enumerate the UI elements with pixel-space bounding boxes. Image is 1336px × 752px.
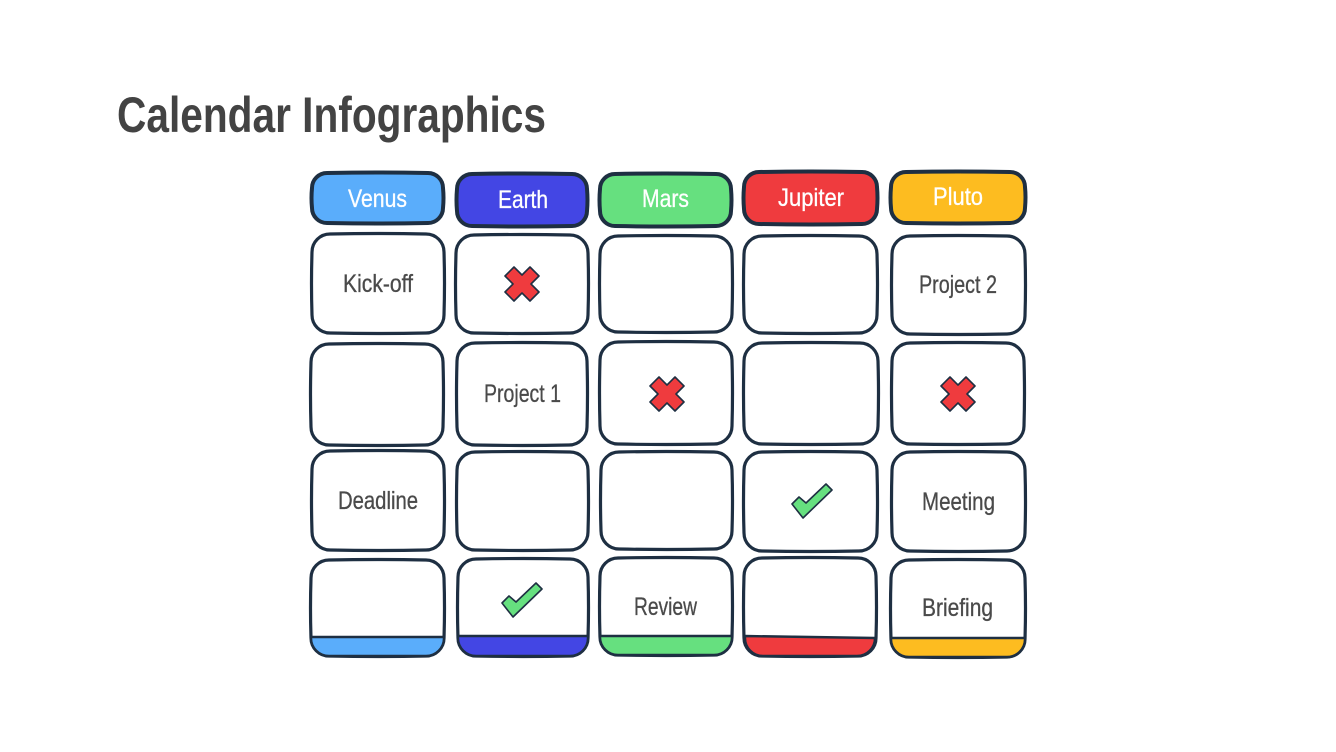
cell: Venus row 2 <box>310 344 444 446</box>
cell: Venus row 3 <box>312 450 444 550</box>
cell: Venus row 3: Deadline <box>338 487 418 515</box>
cell: Pluto row 1 <box>892 236 1026 334</box>
cell: Pluto row 4 <box>890 560 1026 658</box>
header: Earth <box>456 174 588 226</box>
cell: Pluto row 4: Briefing <box>922 594 993 622</box>
header: Venus: Venus <box>348 185 407 213</box>
cell: Venus row 1 <box>312 234 444 334</box>
header: Mars <box>600 174 732 226</box>
cell: Pluto row 3: Meeting <box>922 488 995 516</box>
cell: Earth row 3 <box>456 452 588 550</box>
colour strip: Mars <box>600 636 732 655</box>
cell: Venus row 4 <box>310 560 444 656</box>
colour strip: Pluto <box>891 638 1025 657</box>
cell: Earth row 4 <box>458 558 588 656</box>
cell: Pluto row 1: Project 2 <box>919 271 997 299</box>
colour strip: Jupiter <box>745 636 875 656</box>
icon: green check <box>792 484 832 518</box>
cell: Mars row 3 <box>600 452 732 550</box>
icon: green check <box>502 583 542 617</box>
cell: Mars row 4 <box>600 558 732 656</box>
cell: Mars row 2 <box>600 342 732 444</box>
title: Calendar Infographics <box>117 87 546 143</box>
cell: Pluto row 2 <box>892 342 1024 444</box>
colour strip: Earth <box>458 636 588 656</box>
cell: Jupiter row 2 <box>744 342 878 444</box>
colour strip: Venus <box>311 637 444 656</box>
header: Jupiter <box>744 172 878 224</box>
header: Jupiter: Jupiter <box>778 184 844 212</box>
cell: Venus row 1: Kick-off <box>343 270 413 298</box>
cell: Jupiter row 1 <box>744 236 878 334</box>
cell: Mars row 1 <box>600 236 732 332</box>
cell: Pluto row 3 <box>892 452 1026 552</box>
header: Earth: Earth <box>498 186 548 214</box>
cell: Mars row 4: Review <box>634 593 698 621</box>
header: Pluto <box>890 172 1026 224</box>
icon: red cross <box>941 377 975 411</box>
icon: red cross <box>650 377 684 411</box>
header: Mars: Mars <box>642 185 689 213</box>
cell: Earth row 2: Project 1 <box>484 380 561 408</box>
icon: red cross <box>505 267 539 301</box>
cell: Earth row 2 <box>456 342 588 446</box>
header: Pluto: Pluto <box>933 183 983 211</box>
cell: Jupiter row 4 <box>744 558 876 656</box>
header: Venus <box>312 172 444 224</box>
cell: Jupiter row 3 <box>744 452 878 552</box>
cell: Earth row 1 <box>456 234 588 334</box>
